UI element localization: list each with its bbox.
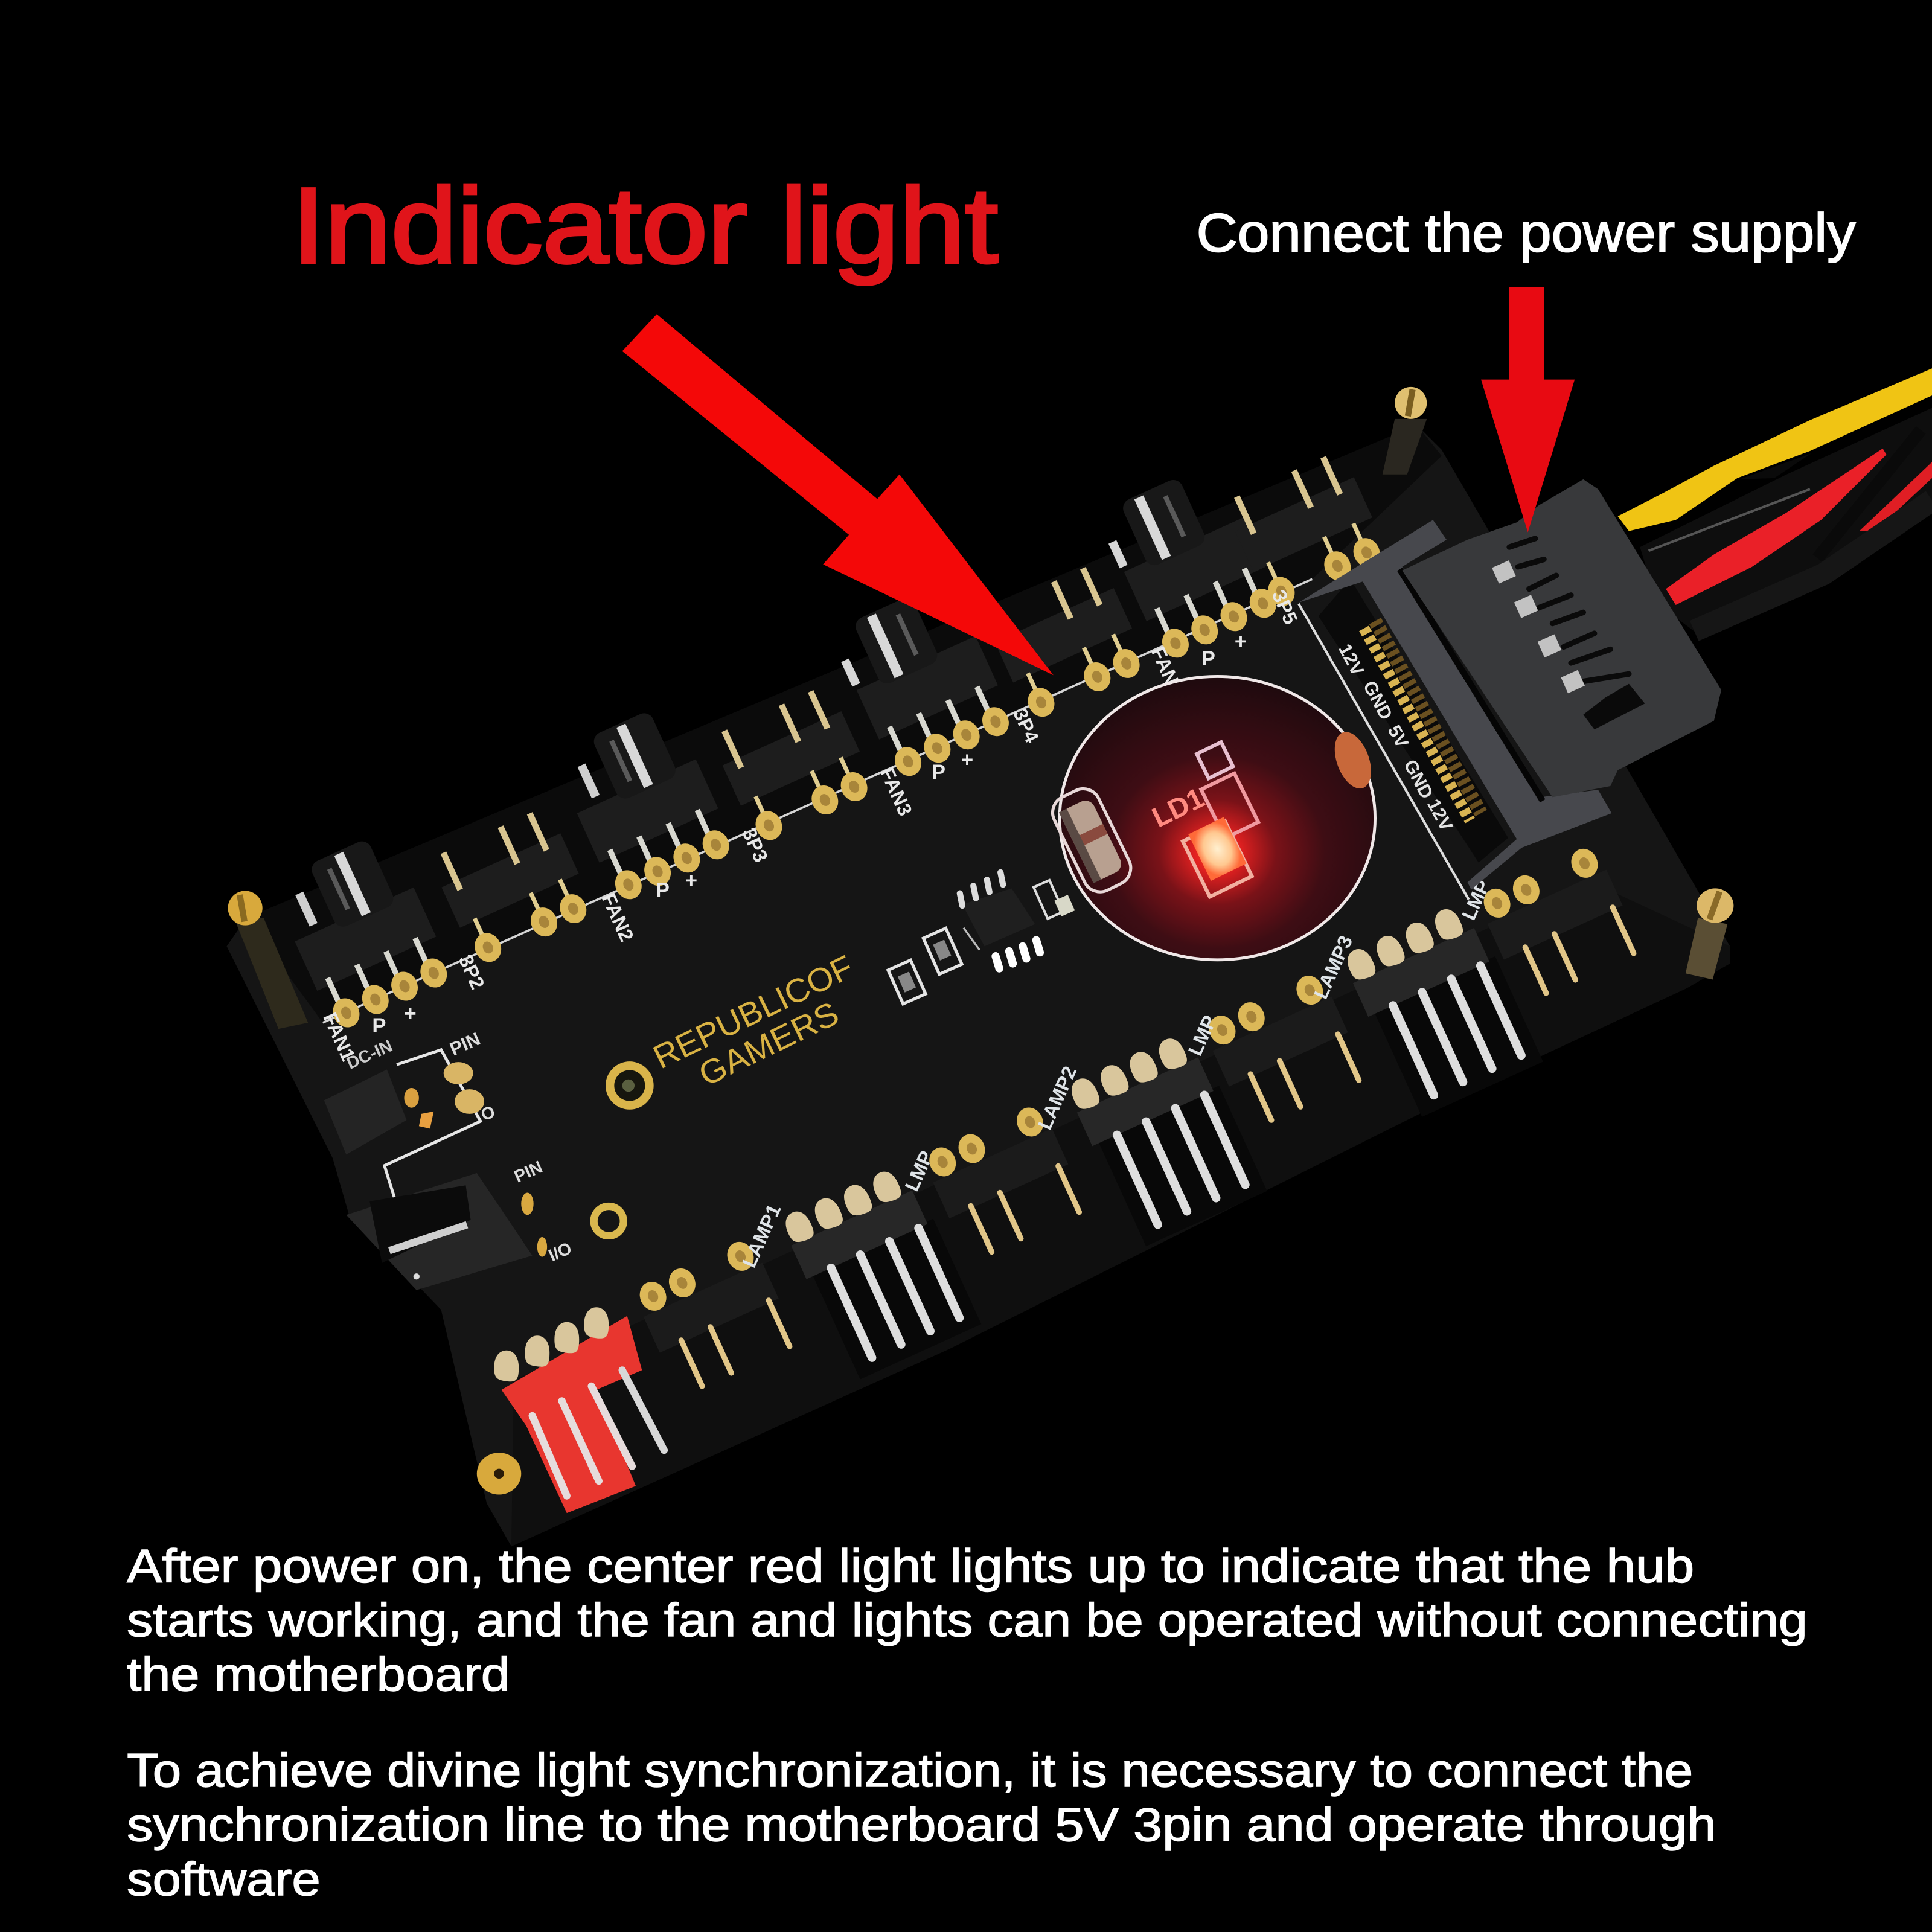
fan labels bottom: LAMP3: [1310, 932, 1357, 1002]
LED: [1188, 817, 1246, 881]
fan labels top: FAN1: [319, 1009, 360, 1064]
pin symbols: P: [372, 1014, 386, 1037]
two-pin connector: [346, 1157, 575, 1290]
fan labels top: 3P4: [1009, 705, 1044, 746]
fan labels top: 3P5: [1268, 586, 1302, 628]
pin symbols: P: [932, 761, 945, 784]
logo text: REPUBLICOF: [647, 948, 859, 1076]
two-pin connector: I/O: [546, 1238, 575, 1265]
circuit board: [227, 425, 1730, 1546]
pin symbols: +: [961, 748, 973, 771]
bottom shaded strip: [511, 881, 1730, 1546]
fan labels top: FAN2: [598, 890, 638, 945]
top header pins: [268, 449, 1390, 1034]
standoff top-left: [228, 891, 308, 1029]
bottom header pins: [631, 843, 1643, 1396]
red cable lower: [1860, 462, 1932, 531]
mounting ring: [594, 1206, 624, 1236]
small components: [888, 928, 962, 1004]
paragraph: synchronization: software: [127, 1854, 321, 1905]
two-pin connector: PIN: [511, 1157, 545, 1187]
connector contacts: [1492, 560, 1585, 693]
power connector: [1299, 479, 1721, 889]
top shaded strip: [246, 425, 1442, 1023]
paragraph: synchronization: To achieve divine light synchronization, it is necessary to connect the: [127, 1745, 1693, 1797]
paragraph: power on: the motherboard: [127, 1649, 510, 1701]
connector voltage labels: GND: [1359, 677, 1396, 723]
connector voltage labels: GND: [1399, 756, 1437, 802]
fan labels top: 3P2: [455, 952, 489, 993]
heading: indicator light: Indicator light: [292, 165, 998, 286]
connector voltage labels: [1334, 641, 1457, 835]
connector voltage labels: 12V: [1334, 641, 1368, 679]
arrow: indicator light: [622, 314, 1054, 675]
cable highlight: [1649, 489, 1810, 551]
chip: [960, 872, 1040, 968]
paragraph: synchronization: synchronization line to the motherboard 5V 3pin and operate through: [127, 1799, 1716, 1851]
connector voltage labels: 12V: [1423, 796, 1457, 835]
pin symbols: +: [404, 1002, 417, 1025]
capacitor outline: [1047, 783, 1136, 898]
connector voltage labels: 5V: [1384, 721, 1413, 752]
fan labels bottom: LMP: [1457, 876, 1494, 923]
small SMD parts: [1034, 880, 1075, 919]
pin symbols: +: [685, 869, 697, 892]
fan labels top: FAN3: [876, 764, 916, 819]
paragraph: power on: After power on, the center red light lights up to indicate that the hub: [127, 1540, 1694, 1592]
DC-IN connector: DC-IN: [344, 1036, 395, 1073]
connector slot with gold pins: [1319, 579, 1508, 863]
standoff right: [1686, 888, 1733, 979]
white connector outline: [1299, 604, 1469, 900]
pin symbols: P: [656, 879, 670, 902]
pin symbols: [372, 630, 1247, 1037]
orange component: [1328, 727, 1378, 793]
yellow cable: [1618, 368, 1932, 531]
LD1 label: LD1: [1147, 782, 1209, 833]
pin symbols: +: [1235, 630, 1247, 653]
fan labels bottom: LAMP1: [738, 1201, 785, 1271]
connector collar: [1299, 520, 1611, 889]
red cable: [1666, 449, 1886, 605]
connector end slot: [1583, 684, 1645, 729]
label: connect the power supply: Connect the power supply: [1197, 203, 1856, 263]
paragraph: power on: starts working, and the fan and lights can be operated without connecting: [127, 1595, 1808, 1646]
paragraph: synchronization: [127, 1745, 1716, 1905]
yellow cable shadow: [1740, 453, 1811, 479]
arrow: power supply: [1481, 287, 1575, 533]
fan labels bottom: LAMP2: [1033, 1063, 1081, 1133]
standoff top-right: [1383, 387, 1427, 475]
connector body: [1402, 479, 1721, 797]
standoff bottom: [477, 1453, 521, 1495]
connector slit: [1399, 569, 1543, 801]
DC-IN connector: [324, 1029, 498, 1205]
pad outlines: [1183, 742, 1258, 897]
connector contact slots: [1509, 539, 1629, 682]
logo mark: [610, 1066, 650, 1105]
DC-IN connector: O: [478, 1102, 498, 1125]
black cable strip: [1817, 430, 1921, 558]
logo text: GAMERS: [693, 994, 845, 1093]
black cable lower: [1694, 501, 1932, 631]
fan labels bottom: [738, 876, 1494, 1271]
red connector pads: [494, 1307, 609, 1381]
fan labels bottom: LMP: [900, 1147, 938, 1194]
power cables: [1618, 368, 1932, 636]
fan labels top: [319, 586, 1302, 1064]
DC-IN connector: PIN: [447, 1029, 483, 1060]
pin symbols: P: [1201, 647, 1215, 670]
fan labels top: FAN4: [1147, 643, 1188, 699]
paragraph: power on: [127, 1540, 1808, 1701]
capacitor: [1059, 798, 1124, 883]
red connector: [494, 1307, 664, 1513]
fan labels bottom: LMP: [1183, 1012, 1221, 1059]
fan labels top: 3P3: [738, 824, 773, 865]
white trace along top row: [323, 579, 1312, 1023]
indicator circle: [1047, 676, 1378, 960]
